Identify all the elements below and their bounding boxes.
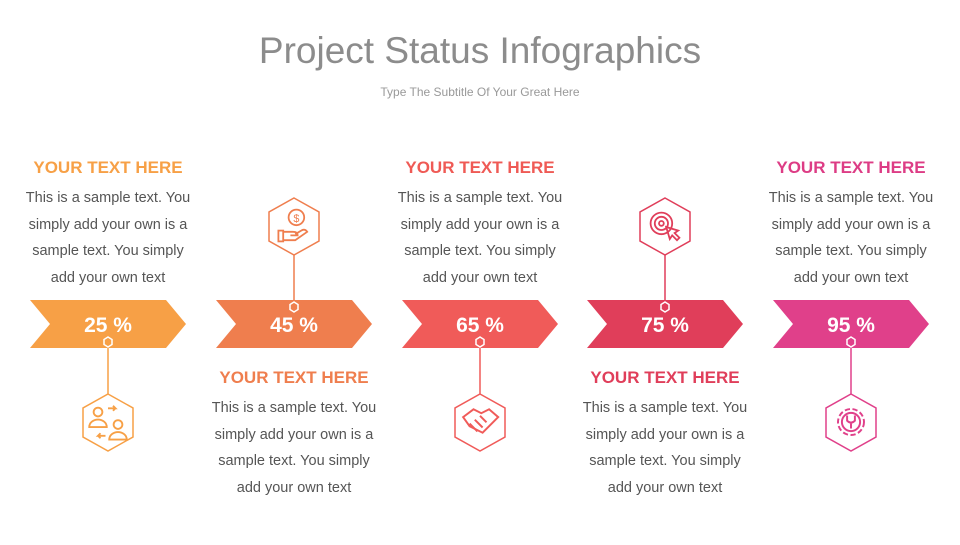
body text 5: This is a sample text. You xyxy=(769,190,933,206)
heading 1: YOUR TEXT HERE xyxy=(33,158,183,177)
body text 5: sample text. You simply xyxy=(775,243,928,259)
value 1: 25 % xyxy=(84,314,132,337)
arrow 1 xyxy=(30,300,186,348)
body text 4: This is a sample text. You xyxy=(583,400,747,416)
value 3: 65 % xyxy=(456,314,504,337)
step 1: 25% xyxy=(26,158,190,451)
body text 3 xyxy=(398,190,562,286)
body text 1: sample text. You simply xyxy=(32,243,185,259)
icon 5: gear wrench xyxy=(826,394,876,451)
connector 1 xyxy=(104,337,112,394)
icon 2: money hand: $ xyxy=(293,213,299,225)
connector 5 xyxy=(847,337,855,394)
step 2: 45% xyxy=(212,198,376,496)
body text 5: simply add your own is a xyxy=(772,217,931,233)
step 4: 75% xyxy=(583,198,747,496)
body text 1: This is a sample text. You xyxy=(26,190,190,206)
body text 1: add your own text xyxy=(51,270,165,286)
body text 1 xyxy=(26,190,190,286)
body text 3: simply add your own is a xyxy=(401,217,560,233)
body text 3: This is a sample text. You xyxy=(398,190,562,206)
connector 4 xyxy=(664,255,666,303)
body text 3: add your own text xyxy=(423,270,537,286)
body text 4 xyxy=(583,400,747,496)
connector 2 xyxy=(293,255,295,303)
body text 4: simply add your own is a xyxy=(586,427,745,443)
body text 2 xyxy=(212,400,376,496)
step 5: 95% xyxy=(769,158,933,451)
value 4: 75 % xyxy=(641,314,689,337)
body text 2: simply add your own is a xyxy=(215,427,374,443)
heading 3: YOUR TEXT HERE xyxy=(405,158,555,177)
body text 5: add your own text xyxy=(794,270,908,286)
body text 2: sample text. You simply xyxy=(218,453,371,469)
body text 4: add your own text xyxy=(608,480,722,496)
connector dot 2 xyxy=(290,302,298,312)
icon 1: people exchange xyxy=(83,394,133,451)
body text 4: sample text. You simply xyxy=(589,453,742,469)
arrow 4 xyxy=(587,300,743,348)
title: Project Status Infographics xyxy=(259,30,701,71)
heading 2: YOUR TEXT HERE xyxy=(219,368,369,387)
arrow 5 xyxy=(773,300,929,348)
body text 2: This is a sample text. You xyxy=(212,400,376,416)
subtitle: Type The Subtitle Of Your Great Here xyxy=(380,85,580,99)
body text 2: add your own text xyxy=(237,480,351,496)
body text 5 xyxy=(769,190,933,286)
step 3: 65% xyxy=(398,158,562,451)
value 2: 45 % xyxy=(270,314,318,337)
icon 2: money hand xyxy=(269,198,319,255)
arrow 2 xyxy=(216,300,372,348)
heading 4: YOUR TEXT HERE xyxy=(590,368,740,387)
value 5: 95 % xyxy=(827,314,875,337)
heading 5: YOUR TEXT HERE xyxy=(776,158,926,177)
icon 4: target xyxy=(640,198,690,255)
body text 1: simply add your own is a xyxy=(29,217,188,233)
body text 3: sample text. You simply xyxy=(404,243,557,259)
icon 3: handshake xyxy=(455,394,505,451)
arrow 3 xyxy=(402,300,558,348)
connector 3 xyxy=(476,337,484,394)
connector dot 4 xyxy=(661,302,669,312)
